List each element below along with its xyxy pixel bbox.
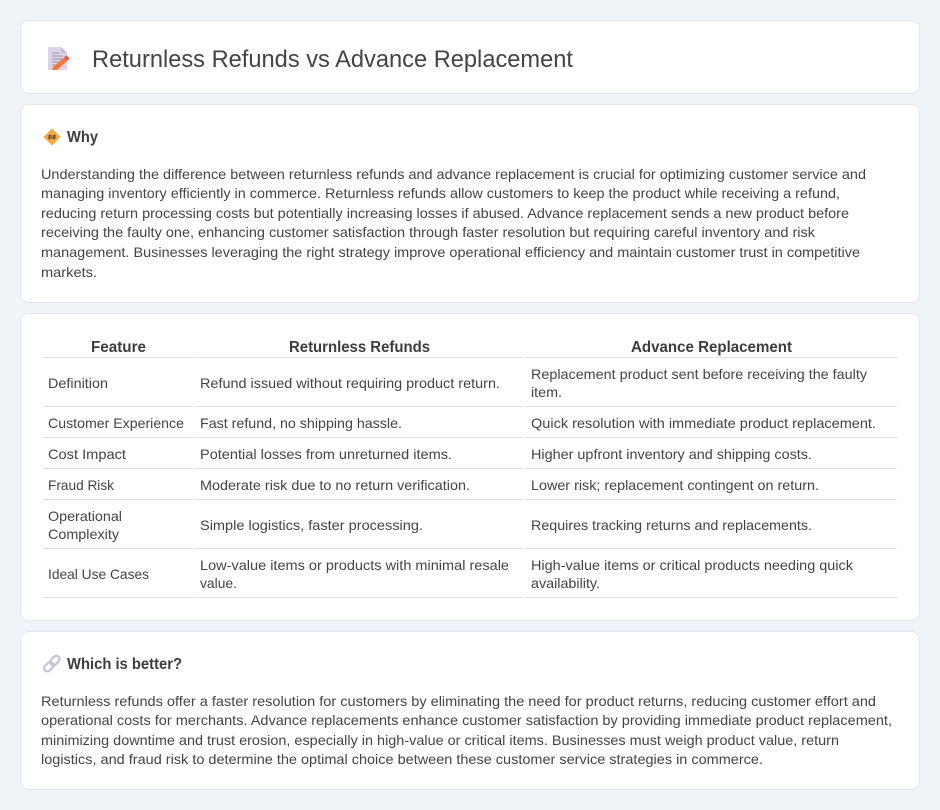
row: cost impact: Potential losses from unreturned items. [200, 446, 452, 462]
table header row: Returnless Refunds [289, 339, 430, 356]
text block: which paragraph: operational costs for merchants. Advance replacements enhance customer satisfaction by providing immediate product replacement, [41, 712, 892, 728]
row: cost impact: Cost Impact [48, 446, 126, 462]
text block: which paragraph [41, 693, 892, 767]
icon: chain link [43, 654, 61, 673]
panel: title header [20, 20, 920, 94]
heading: why: Why [67, 129, 98, 146]
row: fraud risk: Fraud Risk [48, 477, 115, 493]
row: ideal use cases: Low-value items or products with minimal resale [200, 557, 509, 573]
row: operational complexity: Simple logistics, faster processing. [200, 517, 423, 533]
heading: which is better: Which is better? [67, 656, 182, 673]
text block: why paragraph: receiving the faulty one, enhancing customer satisfaction through faster resolution but requiring careful inventory and risk [41, 224, 816, 240]
row: definition: Definition [48, 375, 108, 391]
panel: comparison table [20, 314, 920, 620]
row: ideal use cases: value. [200, 575, 237, 591]
row: definition: Refund issued without requiring product return. [200, 375, 500, 391]
text block: why paragraph: Understanding the difference between returnless refunds and advance replacement is crucial for optimizing customer service and [41, 166, 866, 182]
row: operational complexity: Operational [48, 508, 122, 524]
row: ideal use cases: availability. [531, 575, 600, 591]
text block: why paragraph: reducing return processing costs but potentially increasing losses if abused. Advance replacement sends a new product before [41, 205, 849, 221]
row: ideal use cases: Ideal Use Cases [48, 566, 149, 582]
panel: which is better [20, 632, 920, 790]
row: ideal use cases [48, 557, 854, 591]
row: fraud risk: Moderate risk due to no return verification. [200, 477, 470, 493]
row: customer experience: Quick resolution with immediate product replacement. [531, 415, 876, 431]
row: fraud risk [48, 477, 819, 493]
row: operational complexity: Complexity [48, 526, 119, 542]
text block: which paragraph: Returnless refunds offer a faster resolution for customers by eliminating the need for product returns, reducing customer effort and [41, 693, 876, 709]
table header row: Advance Replacement [631, 339, 793, 356]
text block: why paragraph: management. Businesses leveraging the right strategy improve operational efficiency and maintain customer trust in competitive [41, 244, 860, 260]
row: cost impact [48, 446, 812, 462]
icon: warning diamond [44, 128, 60, 146]
row: operational complexity [48, 508, 812, 542]
table header row: Feature [91, 339, 146, 356]
text block: why paragraph: managing inventory efficiently in commerce. Returnless refunds allow customers to keep the product while receiving a refund, [41, 185, 840, 201]
row: cost impact: Higher upfront inventory and shipping costs. [531, 446, 812, 462]
text block: which paragraph: logistics, and fraud risk to determine the optimal choice between these customer service strategies in commerce. [41, 751, 763, 767]
icon: document with pencil [48, 47, 70, 70]
row: definition [48, 366, 867, 400]
row: ideal use cases: High-value items or critical products needing quick [531, 557, 854, 573]
row: customer experience [48, 415, 876, 431]
row: definition: Replacement product sent before receiving the faulty [531, 366, 867, 382]
row: customer experience: Customer Experience [48, 415, 184, 431]
panel: why [20, 104, 920, 302]
text block: why paragraph: markets. [41, 264, 97, 280]
row: fraud risk: Lower risk; replacement contingent on return. [531, 477, 819, 493]
row: customer experience: Fast refund, no shipping hassle. [200, 415, 402, 431]
text block: why paragraph [41, 166, 866, 280]
row: operational complexity: Requires tracking returns and replacements. [531, 517, 812, 533]
row: definition: item. [531, 384, 562, 400]
table header row [91, 339, 793, 356]
text block: which paragraph: minimizing downtime and trust erosion, especially in high-value or critical items. Businesses must weigh product value, return [41, 732, 839, 748]
title: Returnless Refunds vs Advance Replacement [92, 46, 573, 73]
